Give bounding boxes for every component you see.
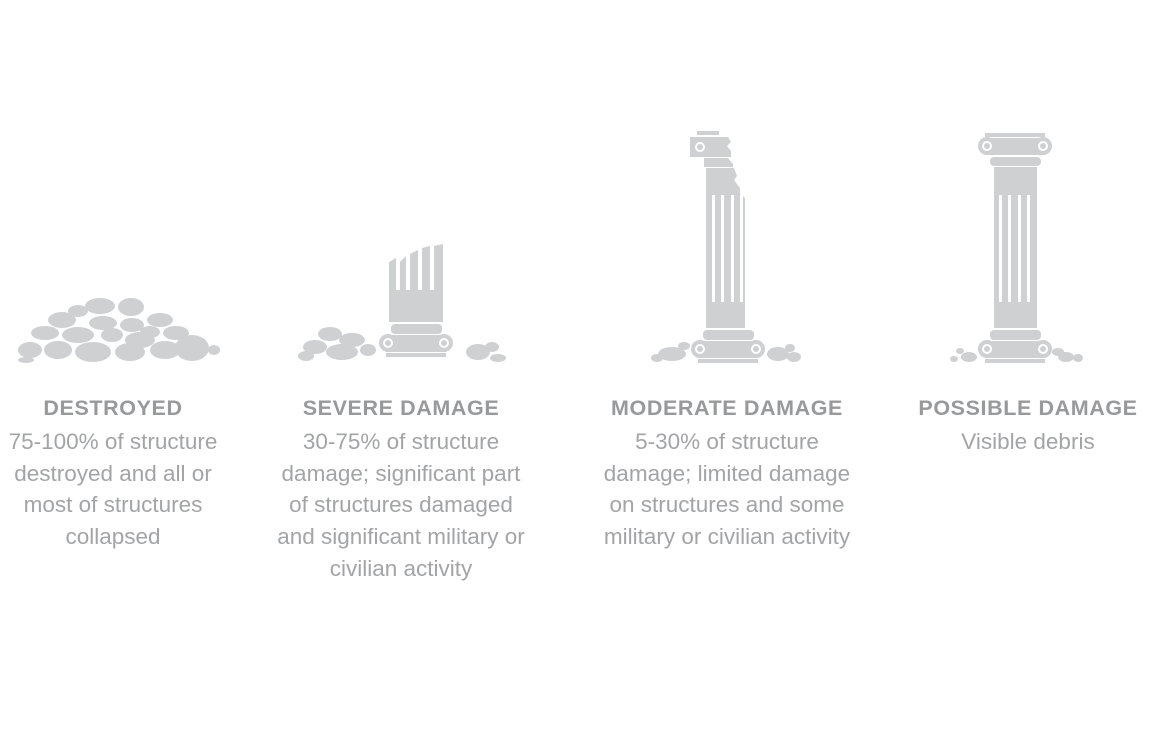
text: destroyed: most of structures [24, 492, 202, 517]
text: destroyed: 75-100% of structure [9, 429, 217, 454]
text: moderate damage: damage; limited damage [604, 461, 850, 486]
icon: possible damage column [950, 133, 1083, 363]
text: destroyed [9, 396, 217, 549]
icon: moderate damage column [651, 131, 801, 363]
text: possible damage [918, 396, 1138, 454]
text: severe damage: SEVERE DAMAGE [303, 396, 499, 420]
text: destroyed: destroyed and all or [14, 461, 212, 486]
text: severe damage: of structures damaged [289, 492, 513, 517]
text: severe damage [277, 396, 525, 581]
text: severe damage: 30-75% of structure [303, 429, 499, 454]
text: moderate damage: on structures and some [609, 492, 845, 517]
text: possible damage: Visible debris [961, 429, 1095, 454]
text: moderate damage [604, 396, 850, 549]
text: destroyed: collapsed [65, 524, 161, 549]
text: moderate damage: MODERATE DAMAGE [611, 396, 843, 420]
text: moderate damage: 5-30% of structure [635, 429, 819, 454]
text: destroyed: DESTROYED [43, 396, 183, 420]
text: possible damage: POSSIBLE DAMAGE [918, 396, 1138, 420]
text: moderate damage: military or civilian activity [604, 524, 850, 549]
icon: destroyed rubble [18, 298, 220, 363]
text: severe damage: civilian activity [330, 556, 472, 581]
text: severe damage: damage; significant part [282, 461, 520, 486]
text: severe damage: and significant military or [277, 524, 525, 549]
icon: severe damage column [298, 244, 506, 362]
